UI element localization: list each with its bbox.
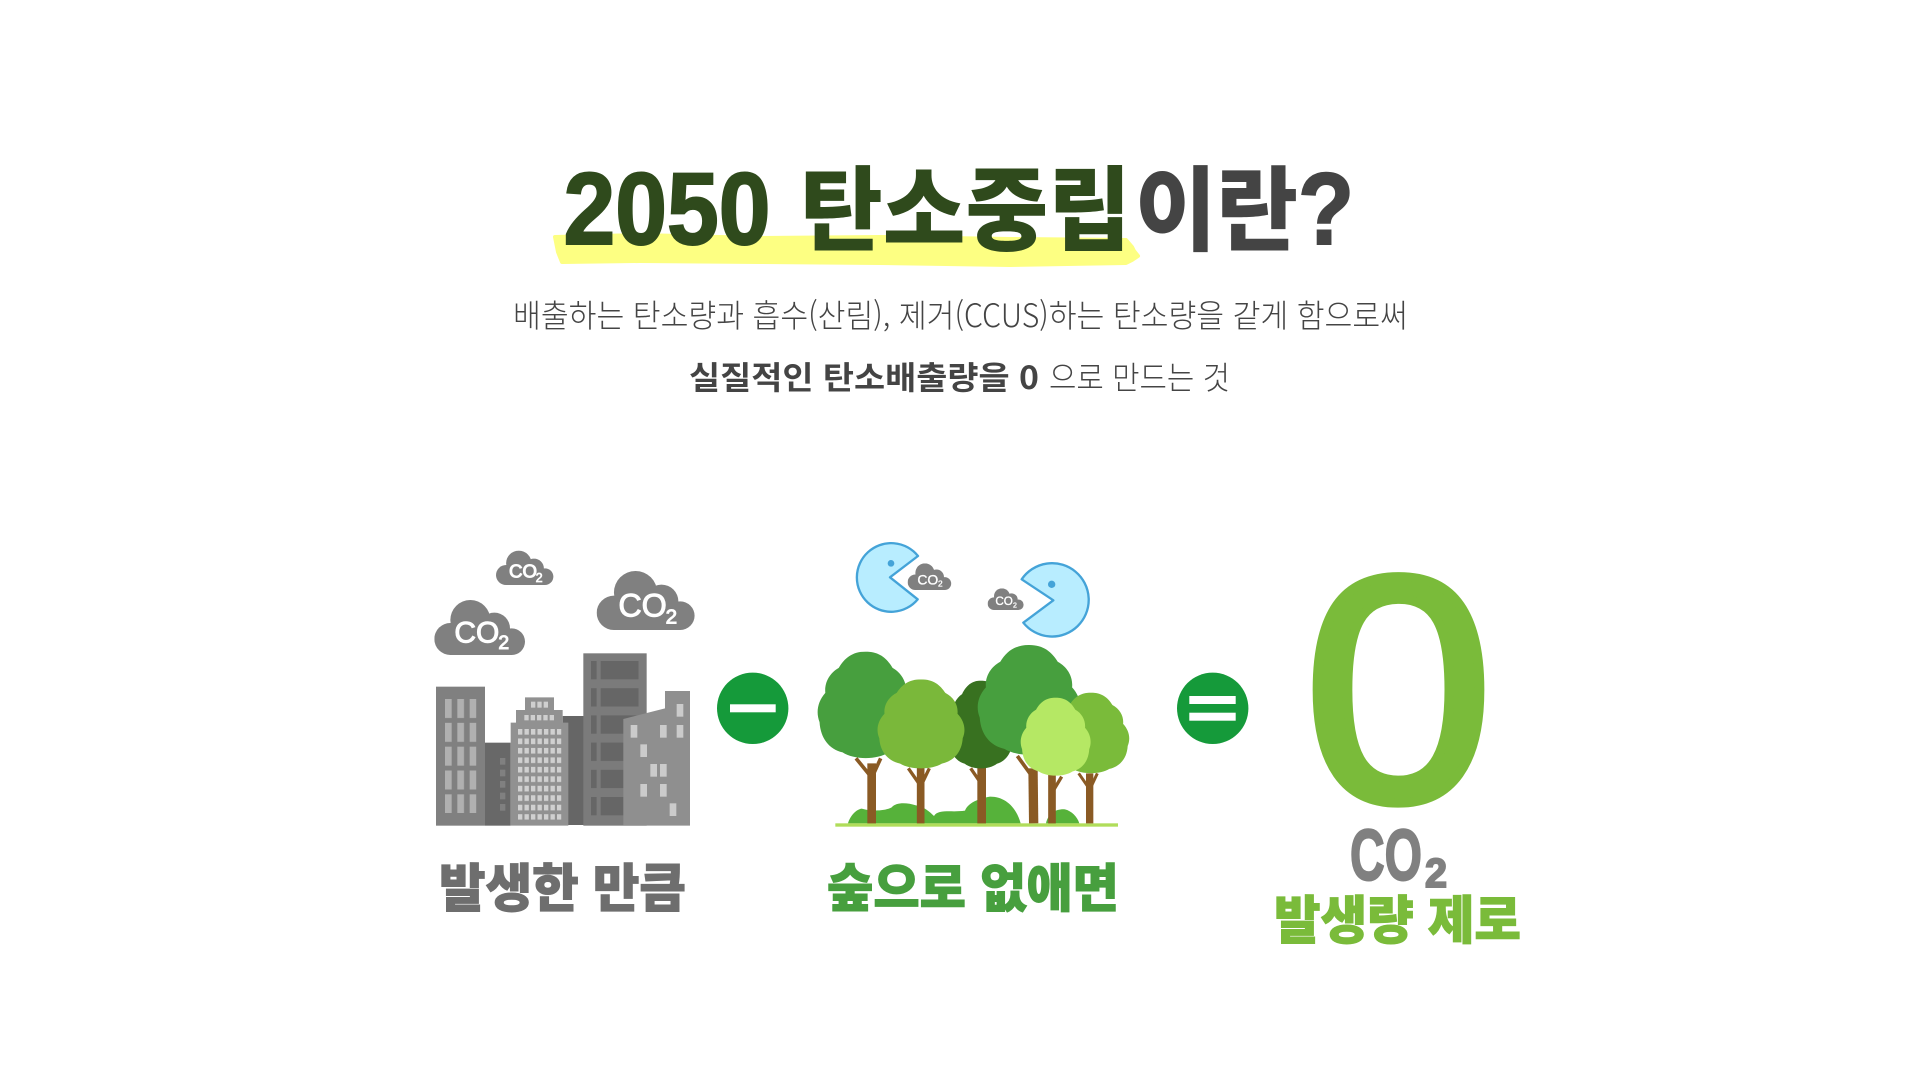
title: 탄소중립 (800, 137, 1131, 270)
label: zero emissions: 발생량 제로 (1274, 879, 1521, 954)
icon: pac-man left (857, 543, 918, 612)
CO2 label: CO (1350, 816, 1422, 896)
label: city: 발생한 만큼 (439, 847, 686, 922)
icon: pac-man right (1022, 563, 1089, 637)
cloud: eaten left: 2 (938, 579, 943, 589)
title: ? (1298, 152, 1354, 266)
title (564, 137, 1354, 270)
cloud: left: 2 (498, 633, 509, 654)
illustration: city with CO2 clouds (434, 551, 695, 826)
icon: equals (1177, 673, 1248, 744)
bushes (848, 797, 1079, 823)
cloud: eaten left (908, 563, 951, 590)
title: 2050 (564, 152, 770, 266)
cloud: eaten right: 2 (1013, 603, 1017, 610)
cloud: left: CO (454, 616, 499, 649)
subtitle line 2 (689, 353, 1230, 399)
subtitle line 2: 으로 만드는 것 (1049, 353, 1230, 399)
icon: minus (717, 673, 788, 744)
cloud: right (597, 571, 695, 630)
illustration: forest with CO2 eaters (818, 543, 1129, 827)
cloud: top: 2 (536, 571, 543, 585)
cloud: eaten right: CO (995, 595, 1013, 608)
tree trunks (856, 756, 1097, 823)
cloud: eaten left: CO (917, 571, 938, 587)
cloud: eaten right (988, 588, 1024, 610)
cloud: left (434, 600, 525, 655)
cloud: top: CO (509, 560, 537, 581)
subtitle line 2: 실질적인 탄소배출량을 0 (689, 353, 1039, 399)
title highlight (555, 235, 1138, 265)
cloud: right: CO (618, 588, 667, 624)
tree crowns (818, 645, 1129, 776)
big zero: 0 (1304, 511, 1493, 868)
label: forest: 숲으로 없애면 (827, 847, 1119, 922)
buildings (436, 653, 690, 826)
cloud: right: 2 (666, 605, 677, 628)
ground (835, 823, 1118, 827)
title: 이란 (1135, 137, 1298, 270)
CO2 label: 2 (1425, 850, 1447, 896)
subtitle line 1: 배출하는 탄소량과 흡수(산림), 제거(CCUS)하는 탄소량을 같게 함으로써 (513, 291, 1408, 337)
cloud: top (496, 551, 553, 585)
